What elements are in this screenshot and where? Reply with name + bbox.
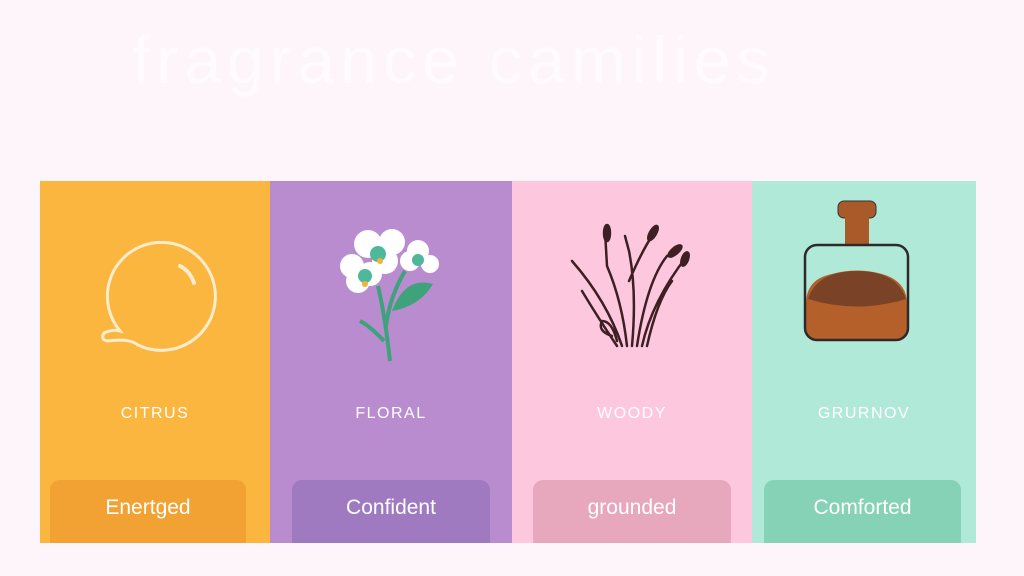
button bbox=[533, 480, 731, 543]
label: GRURNOV bbox=[818, 405, 910, 422]
button: Comforted bbox=[813, 496, 912, 519]
panel: gourmand bbox=[752, 181, 976, 543]
panel: woody bbox=[512, 181, 752, 543]
label: FLORAL bbox=[355, 405, 427, 422]
button: grounded bbox=[588, 496, 676, 519]
button bbox=[292, 480, 490, 543]
button: Confident bbox=[346, 496, 436, 519]
button bbox=[764, 480, 961, 543]
button: Enertged bbox=[105, 496, 191, 519]
label: CITRUS bbox=[121, 405, 189, 422]
icon: bubble bbox=[101, 241, 217, 352]
icon: bottle bbox=[804, 200, 910, 342]
button bbox=[50, 480, 246, 543]
icon: flower bbox=[340, 229, 439, 362]
label: WOODY bbox=[597, 405, 667, 422]
panel: citrus bbox=[40, 181, 270, 543]
title: fragrance camilies bbox=[132, 23, 776, 97]
icon: branches bbox=[570, 224, 690, 348]
panel: floral bbox=[270, 181, 512, 543]
